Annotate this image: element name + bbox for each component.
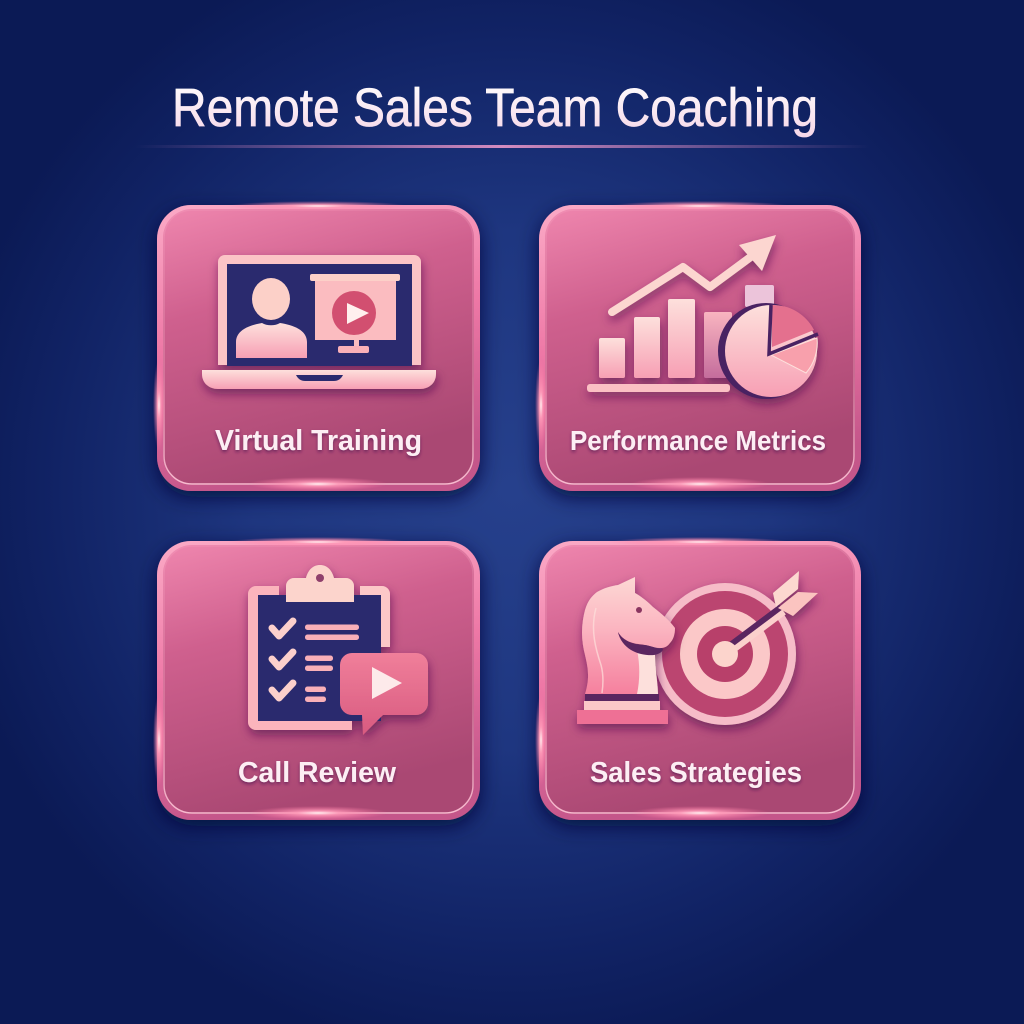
icon: target with arrow [654,571,818,725]
label: performance metrics: Performance Metrics [570,425,826,456]
checklist marks [272,621,293,698]
speech bubble with play button [340,653,428,735]
panel: call review [153,537,480,820]
icon: laptop with video lesson [202,255,436,389]
bar chart [587,299,732,392]
icon: clipboard checklist [248,565,428,735]
panel: virtual training [153,201,480,491]
label: call review: Call Review [238,757,396,789]
label: virtual training: Virtual Training [215,425,422,457]
checklist lines [305,624,359,702]
trend arrow [612,235,776,312]
icon: presenter [236,278,307,358]
stopwatch pie chart [718,285,818,399]
icon: chess knight [577,577,675,724]
panel: sales strategies [535,537,861,820]
label: sales strategies: Sales Strategies [590,757,802,789]
panel: performance metrics [535,201,861,491]
title: Remote Sales Team Coaching [172,78,818,138]
icon: presentation screen with play button [310,274,400,353]
icon: bar chart with trend arrow and pie stopwatch [587,235,818,399]
clipboard clip [286,565,354,602]
